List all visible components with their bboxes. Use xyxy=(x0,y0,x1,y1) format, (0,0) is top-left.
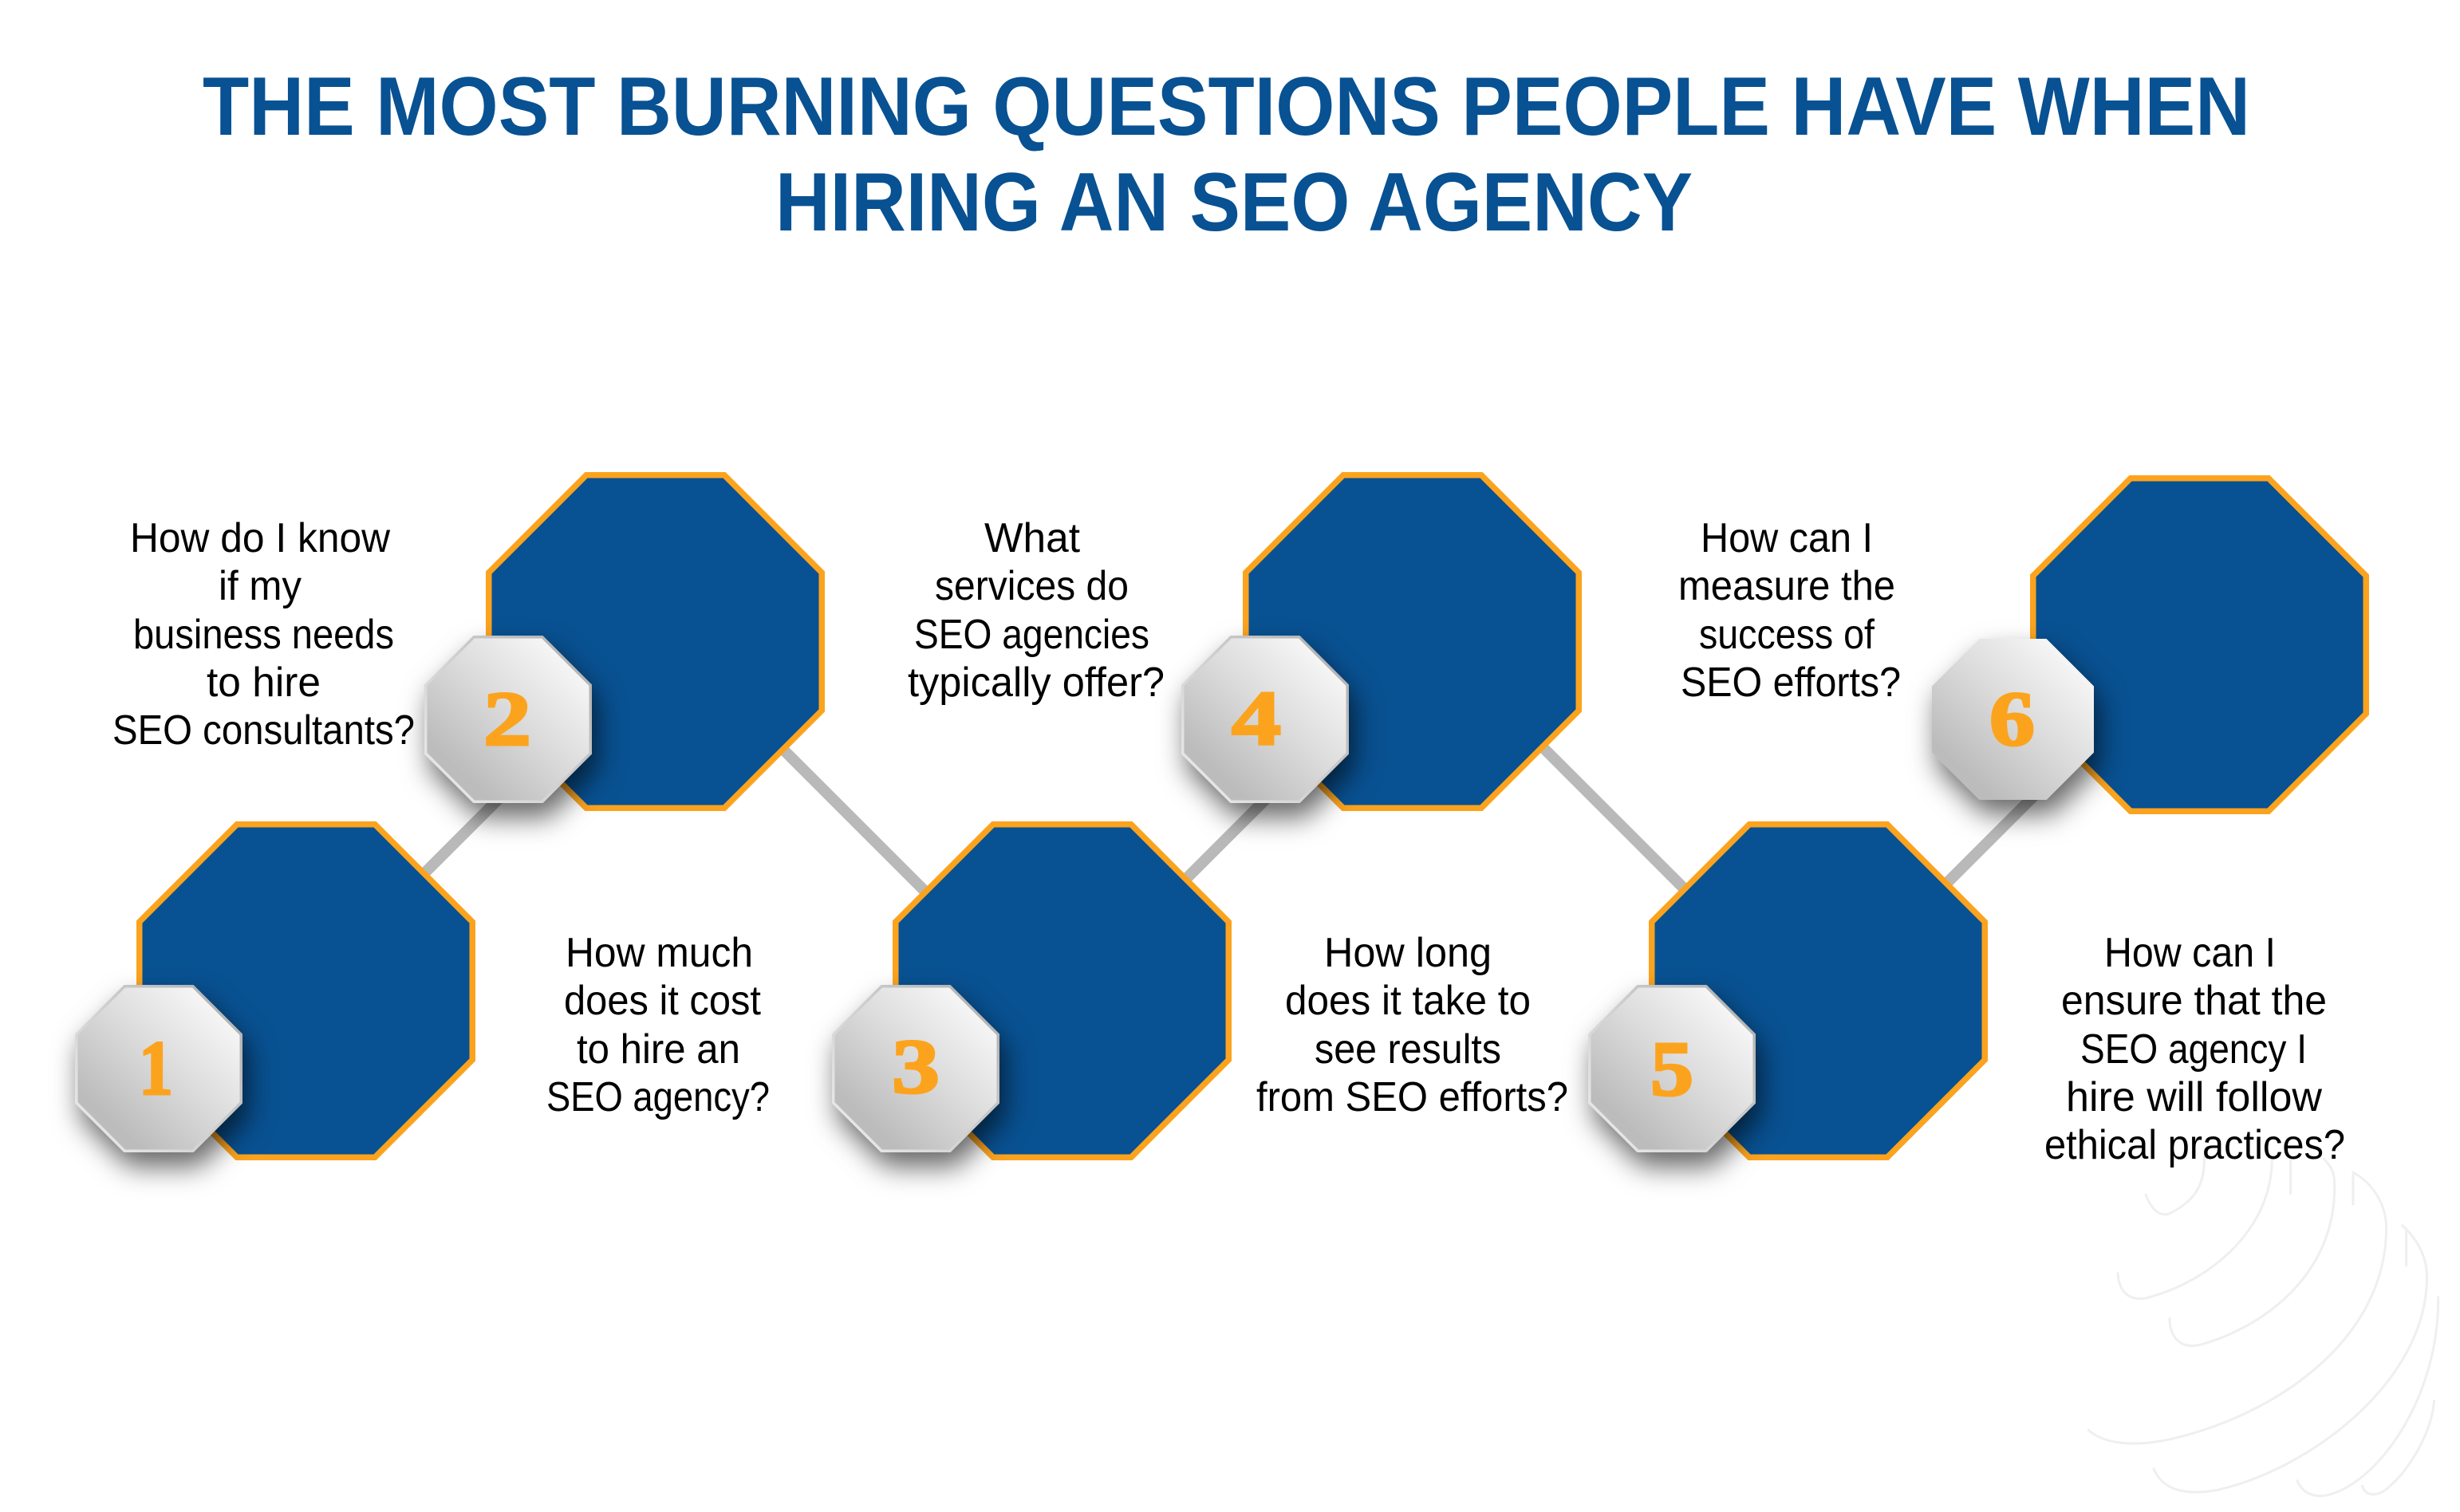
question 6 text: ensure that the xyxy=(2061,978,2327,1024)
octagon 3 xyxy=(896,825,1228,1157)
question 5 text: How long xyxy=(1324,930,1492,976)
question 5 text: does it take to xyxy=(1285,978,1531,1024)
badge 6: 6 xyxy=(1989,676,2035,762)
question 1 text: if my xyxy=(219,563,302,609)
badge 4: 4 xyxy=(1232,675,1281,762)
title: HIRING AN SEO AGENCY xyxy=(775,156,1693,249)
question 3 text: does it cost xyxy=(564,978,762,1024)
question 3 text: SEO agency? xyxy=(546,1074,770,1120)
question 5 text: see results xyxy=(1315,1026,1501,1073)
badge 2: 2 xyxy=(483,676,531,762)
badge 4 xyxy=(1181,636,1349,803)
question 1 text: business needs xyxy=(133,612,394,658)
question 2 text: What xyxy=(984,515,1081,561)
watermark: faint globe lines xyxy=(2088,1156,2438,1496)
question 4 text: measure the xyxy=(1678,563,1895,609)
question 6 text: ethical practices? xyxy=(2044,1122,2345,1168)
question 2 text xyxy=(908,515,1165,706)
question 4 text xyxy=(1678,515,1901,706)
question 2 text: typically offer? xyxy=(908,660,1165,706)
octagon 5 xyxy=(1652,825,1985,1157)
octagon 1 xyxy=(140,825,472,1157)
question 1 text xyxy=(112,515,415,754)
badge 2 xyxy=(424,636,592,803)
question 2 text: services do xyxy=(935,563,1129,609)
badge 6 xyxy=(1932,639,2094,800)
badge 3: 3 xyxy=(892,1024,940,1110)
octagon 4 xyxy=(1246,475,1579,808)
question 6 text xyxy=(2044,930,2345,1168)
question 5 text: from SEO efforts? xyxy=(1256,1074,1568,1120)
octagon 2 xyxy=(489,475,822,808)
badge 5: 5 xyxy=(1650,1026,1693,1112)
question 1 text: SEO consultants? xyxy=(112,707,415,754)
question 3 text xyxy=(546,930,770,1120)
badge 5 xyxy=(1588,985,1756,1152)
question 3 text: How much xyxy=(566,930,753,976)
question 4 text: success of xyxy=(1699,612,1875,658)
question 1 text: How do I know xyxy=(130,515,390,561)
question 2 text: SEO agencies xyxy=(914,612,1149,658)
question 6 text: How can I xyxy=(2104,930,2276,976)
question 1 text: to hire xyxy=(207,660,321,706)
question 4 text: SEO efforts? xyxy=(1681,660,1901,706)
badge 1 xyxy=(75,985,242,1152)
octagon 6 xyxy=(2033,478,2366,811)
connector lines xyxy=(383,720,2074,915)
badge 3 xyxy=(832,985,999,1152)
question 4 text: How can I xyxy=(1701,515,1873,561)
question 6 text: hire will follow xyxy=(2066,1074,2322,1120)
question 5 text xyxy=(1256,930,1568,1120)
title xyxy=(203,61,2250,249)
title: THE MOST BURNING QUESTIONS PEOPLE HAVE WHEN xyxy=(203,61,2250,153)
badge 1: 1 xyxy=(139,1026,173,1112)
question 3 text: to hire an xyxy=(577,1026,740,1073)
question 6 text: SEO agency I xyxy=(2080,1026,2307,1073)
